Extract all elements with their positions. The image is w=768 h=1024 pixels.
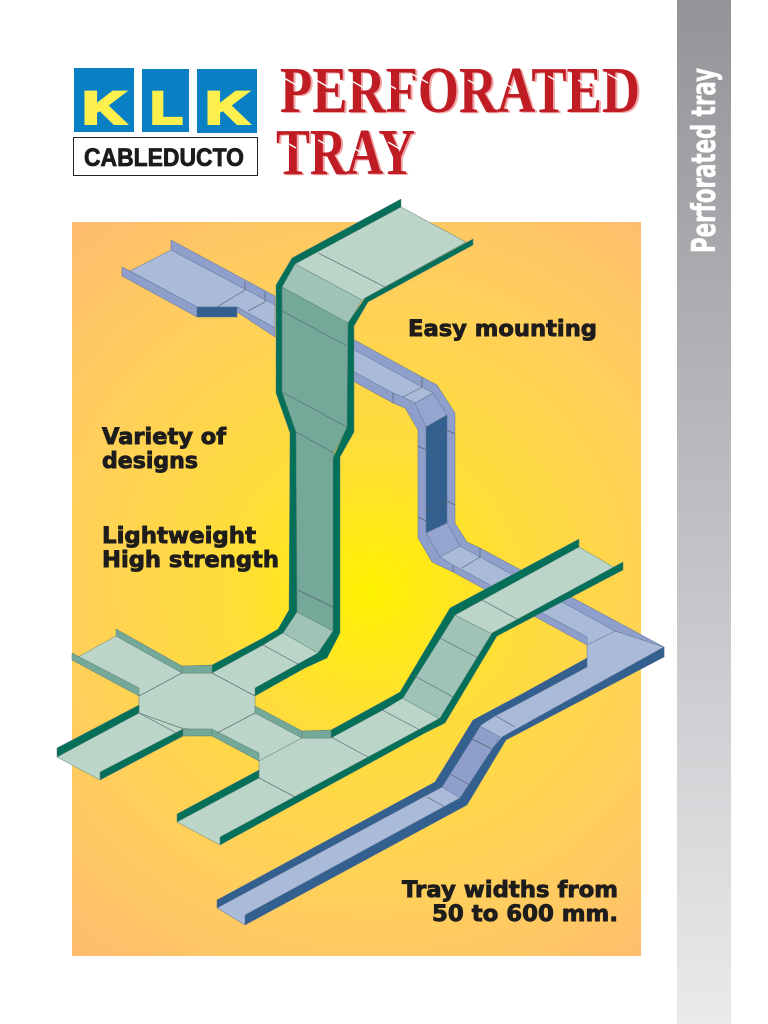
green riser tray [212, 199, 473, 696]
title: TRAY [276, 116, 415, 189]
upper left blue section [122, 240, 275, 337]
callout: variety of designs [102, 425, 226, 474]
background panel [72, 222, 641, 956]
title: PERFORATED [282, 55, 642, 128]
KLK logo: L [150, 82, 182, 134]
callout: tray widths: 50 to 600 mm. [432, 902, 618, 927]
blue tray [122, 240, 664, 925]
KLK logo: CABLEDUCTO [84, 144, 244, 172]
lower blue run [217, 631, 664, 925]
KLK logo [74, 68, 258, 176]
riser flange right [255, 239, 473, 696]
KLK logo: K [82, 82, 126, 134]
tee floor [217, 713, 302, 761]
title: TRAY [278, 117, 417, 190]
callout: variety of designs: Variety of [102, 425, 226, 450]
title [276, 54, 642, 190]
KLK logo: K [206, 82, 249, 134]
callout: tray widths [402, 878, 618, 927]
riser flange left [212, 199, 401, 673]
cross floor [139, 673, 255, 733]
tee flange back [331, 539, 579, 738]
callout: lightweight high strength: Lightweight [102, 524, 256, 549]
sidebar [677, 0, 731, 1024]
callout: lightweight high strength [102, 524, 279, 573]
callout: lightweight high strength: High strength [102, 548, 279, 573]
cross and tee tray [57, 539, 623, 845]
tee flange front [220, 562, 623, 845]
callout: variety of designs: designs [102, 449, 198, 474]
callout: easy mounting: Easy mounting [408, 317, 597, 342]
blue bend and riser [340, 332, 664, 657]
title: PERFORATED [280, 54, 640, 127]
callout: tray widths: Tray widths from [402, 878, 618, 903]
